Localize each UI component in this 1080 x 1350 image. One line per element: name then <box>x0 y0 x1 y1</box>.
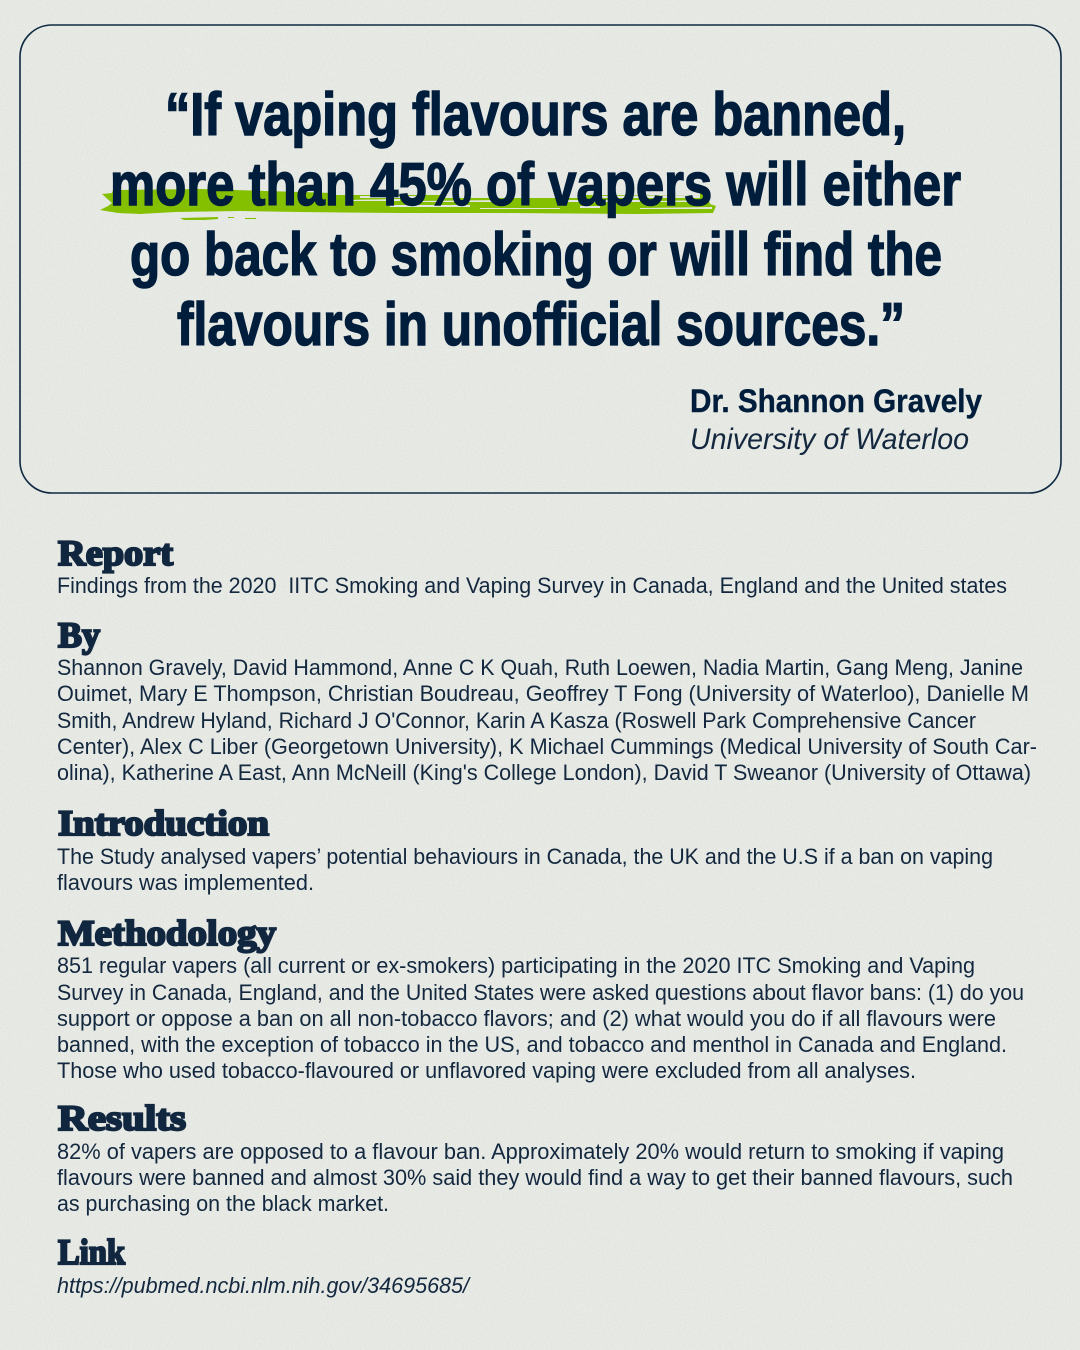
section: introduction <box>57 803 993 895</box>
section: introduction: Introduction <box>58 803 269 843</box>
section: report: Report <box>58 533 173 573</box>
section: results <box>57 1098 1013 1216</box>
green brush highlight <box>100 189 716 220</box>
section: authors: Ouimet, Mary E Thompson, Christian Boudreau, Geoffrey T Fong (University of Waterloo), Danielle M <box>57 681 1029 706</box>
section: results: Results <box>58 1098 186 1138</box>
section: methodology <box>57 913 1024 1083</box>
section: methodology: 851 regular vapers (all current or ex-smokers) participating in the 2020 ITC Smoking and Vaping <box>57 953 975 978</box>
section: link: https://pubmed.ncbi.nlm.nih.gov/34695685/ <box>57 1273 472 1298</box>
section: authors: By <box>58 615 100 655</box>
section: methodology: Those who used tobacco-flavoured or unflavored vaping were excluded from all analyses. <box>57 1058 916 1083</box>
section: methodology: Survey in Canada, England, and the United States were asked questions about flavor bans: (1) do you <box>57 980 1024 1005</box>
quote attribution: University of Waterloo <box>690 423 969 456</box>
section: introduction: The Study analysed vapers’ potential behaviours in Canada, the UK and the U.S if a ban on vaping <box>57 844 993 869</box>
quote text: flavours in unofficial sources.” <box>177 291 905 358</box>
section: introduction: flavours was implemented. <box>57 870 314 895</box>
section: authors: olina), Katherine A East, Ann McNeill (King's College London), David T Sweanor (University of Ottawa) <box>57 760 1031 785</box>
section: authors: Smith, Andrew Hyland, Richard J O'Connor, Karin A Kasza (Roswell Park Comprehensive Cancer <box>57 708 976 733</box>
section: results: flavours were banned and almost 30% said they would find a way to get their banned flavours, such <box>57 1165 1013 1190</box>
quote attribution: Dr. Shannon Gravely <box>690 383 982 419</box>
section: results: as purchasing on the black market. <box>57 1191 389 1216</box>
section: authors: Center), Alex C Liber (Georgetown University), K Michael Cummings (Medical University of South Car- <box>57 734 1037 759</box>
panel: quote <box>20 25 1061 493</box>
quote text: “If vaping flavours are banned, <box>165 81 906 148</box>
section: results: 82% of vapers are opposed to a flavour ban. Approximately 20% would return to smoking if vaping <box>57 1139 1004 1164</box>
quote attribution <box>690 383 982 456</box>
section: report <box>57 533 1007 598</box>
section: report: Findings from the 2020 IITC Smoking and Vaping Survey in Canada, England and the United states <box>57 573 1007 598</box>
quote text <box>110 81 961 358</box>
section: methodology: Methodology <box>58 913 276 953</box>
section: methodology: banned, with the exception of tobacco in the US, and tobacco and menthol in Canada and England. <box>57 1032 1007 1057</box>
section: authors <box>57 615 1037 785</box>
section: link: Link <box>58 1232 125 1272</box>
section: authors: Shannon Gravely, David Hammond, Anne C K Quah, Ruth Loewen, Nadia Martin, Gang Meng, Janine <box>57 655 1023 680</box>
section: link <box>57 1232 472 1298</box>
section: methodology: support or oppose a ban on all non-tobacco flavors; and (2) what would you do if all flavours were <box>57 1006 996 1031</box>
